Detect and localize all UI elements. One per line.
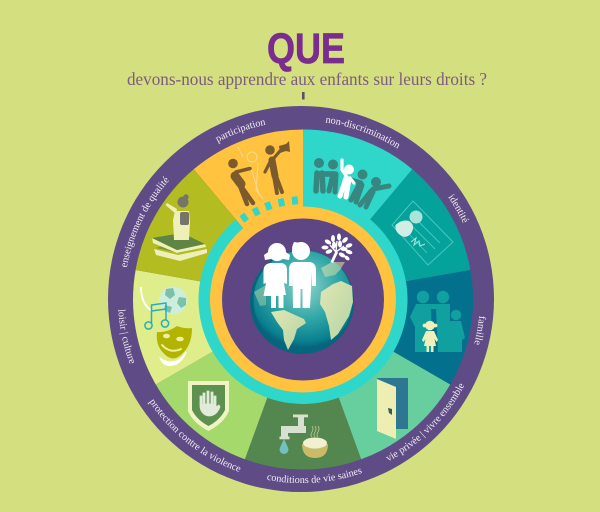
icon: family: [410, 291, 465, 352]
label: enseignement de qualité: enseignement de qualité: [122, 176, 169, 267]
label: famille: famille: [474, 316, 486, 345]
yellow ring: [210, 206, 396, 392]
label: vie privée: vie privée | vivre ensemble: [386, 384, 464, 460]
wedge: conditions de vie saines: [245, 300, 361, 470]
wedge: participation: [194, 130, 303, 300]
label: identité: identité: [448, 194, 470, 223]
wedge: protection: [156, 300, 303, 459]
icon: shield with hand: [188, 381, 229, 431]
icon: participation figures: [228, 141, 290, 204]
icon: water tap and bowl: [280, 414, 328, 458]
icon: tree: [322, 234, 353, 263]
label: loisir: loisir | culture: [118, 309, 134, 364]
girl: [264, 243, 290, 308]
label: conditions de vie saines: conditions de vie saines: [267, 468, 362, 483]
wedge: identité: [303, 169, 470, 300]
label: participation: participation: [216, 120, 266, 144]
subtitle: devons-nous apprendre aux enfants sur leurs droits ?: [127, 69, 487, 89]
cyan ring: [199, 195, 408, 404]
cyan dashes: [239, 196, 298, 223]
icon: globe: [250, 250, 354, 354]
title: QUE: [267, 25, 345, 73]
icon: teacher on books: [152, 194, 207, 261]
continents: [254, 262, 353, 350]
wedge: non-discrimination: [303, 130, 412, 300]
wedge: famille: [303, 270, 473, 384]
icon: door: [377, 378, 408, 439]
centre disc: [222, 218, 384, 380]
icon: identity card: [392, 201, 453, 265]
wedge: vie privée: [303, 300, 450, 459]
wedge: enseignement: [136, 169, 303, 300]
outer ring: [108, 106, 494, 492]
wedge: loisir: [133, 270, 303, 384]
label: non-discrimination: non-discrimination: [326, 118, 400, 149]
icon: leisure, ball, notes and mask: [141, 286, 192, 365]
icon: two children: [264, 242, 316, 308]
tick marker: [302, 92, 305, 100]
ring labels: [118, 118, 486, 483]
boy: [289, 242, 316, 308]
icon: non-discrimination figures: [314, 158, 389, 207]
label: protection: protection contre la violence: [148, 399, 240, 472]
